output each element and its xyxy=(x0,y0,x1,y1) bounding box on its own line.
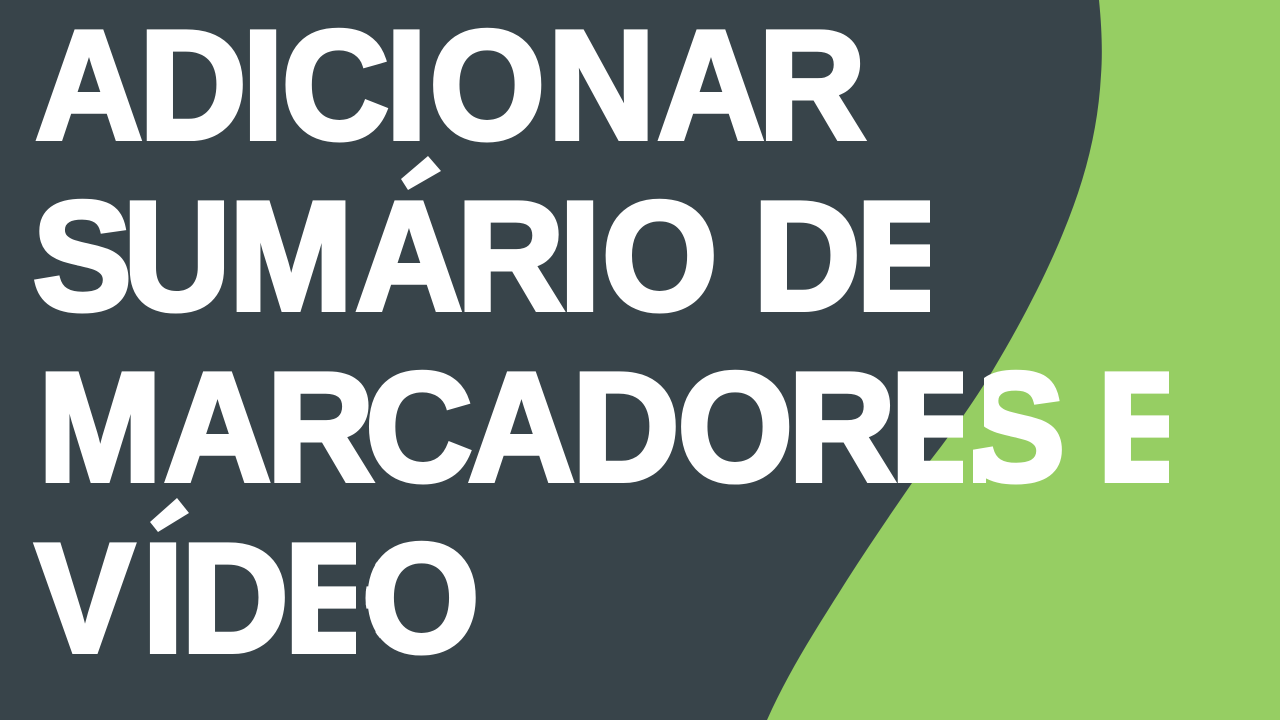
green curved panel xyxy=(767,0,1280,720)
accent on Í xyxy=(150,498,189,532)
title xyxy=(32,28,1169,656)
title: VÍDEO xyxy=(35,512,480,685)
title: ADICIONAR xyxy=(35,0,866,172)
title: MARCADORES E xyxy=(38,341,1196,514)
title: SUMÁRIO DE xyxy=(33,170,955,343)
accent on Á xyxy=(401,156,441,190)
